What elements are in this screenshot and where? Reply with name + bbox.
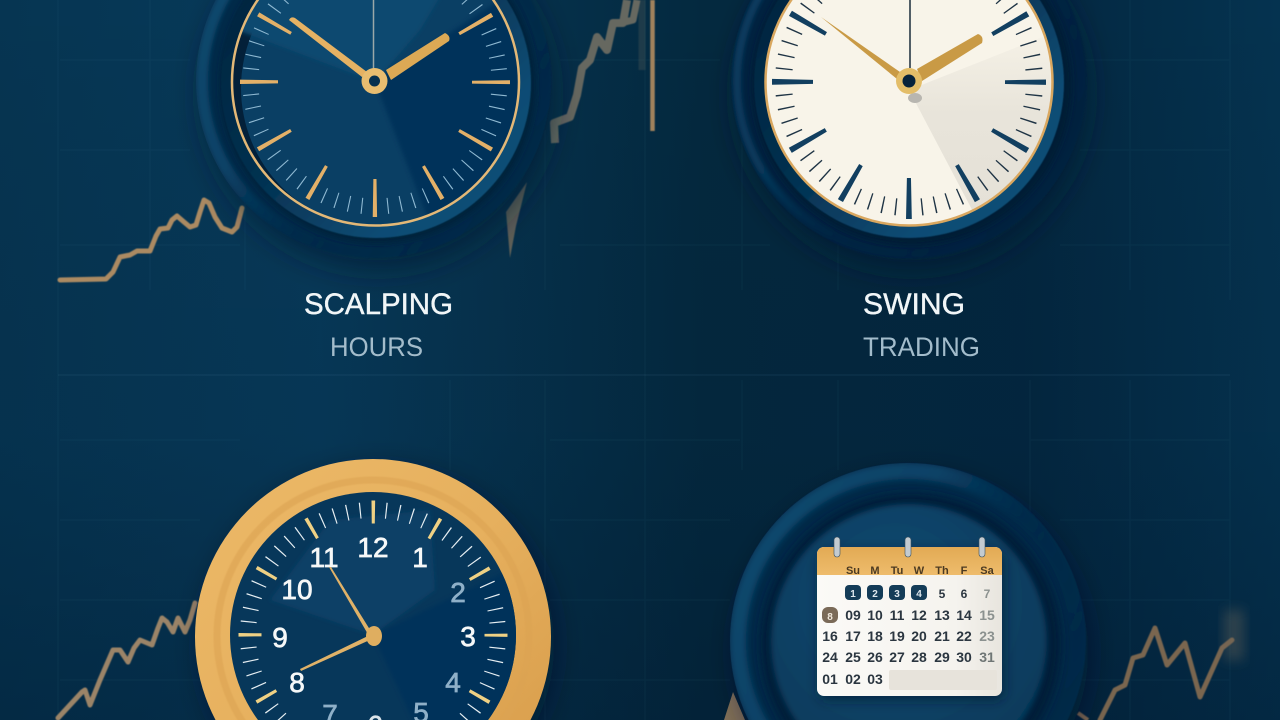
chart: rising line left of clock three <box>58 603 195 718</box>
clock: scalping <box>197 0 554 270</box>
chart: faded line right of scalping clock <box>506 0 652 258</box>
weekday labels: F <box>961 565 968 577</box>
numerals <box>272 532 476 720</box>
pivot <box>366 626 382 646</box>
label: swing: SWING <box>863 288 965 321</box>
gold ring <box>766 0 1052 226</box>
minute ticks <box>248 510 498 720</box>
clock shadow and bezel <box>731 0 1088 270</box>
numerals: 10 <box>281 574 313 605</box>
numerals: 2 <box>450 577 466 608</box>
day numbers: 28 <box>911 649 927 665</box>
clock face <box>229 491 530 720</box>
numerals: 1 <box>412 542 428 573</box>
hour ticks <box>259 0 491 198</box>
day numbers: 10 <box>867 607 883 623</box>
day numbers: 22 <box>956 628 972 644</box>
calendar page <box>817 547 1002 696</box>
hands <box>300 567 372 671</box>
calendar <box>817 537 1004 700</box>
day numbers: 19 <box>889 628 905 644</box>
day numbers: 29 <box>934 649 950 665</box>
label: hours: HOURS <box>330 332 423 362</box>
pivot <box>896 68 922 103</box>
day numbers: 03 <box>867 671 883 687</box>
day numbers: 21 <box>934 628 950 644</box>
day numbers: 7 <box>984 587 991 601</box>
day numbers: 14 <box>956 607 972 623</box>
chart: rising line left of scalping clock <box>60 200 242 280</box>
hour ticks <box>250 512 496 720</box>
day numbers: 31 <box>979 649 995 665</box>
day numbers: 17 <box>845 628 861 644</box>
day numbers: 24 <box>822 649 838 665</box>
minute hand <box>289 17 367 77</box>
hour hand <box>917 34 982 81</box>
numerals: 3 <box>460 621 476 652</box>
chart: fragment beside calendar <box>724 692 745 720</box>
day numbers: 16 <box>822 628 838 644</box>
weekday labels: Tu <box>891 565 903 577</box>
dial disc <box>730 463 1088 720</box>
minute ticks <box>784 0 1034 208</box>
calendar shadow <box>819 552 1004 700</box>
numerals: 9 <box>272 622 288 653</box>
day numbers: 11 <box>890 607 905 623</box>
day numbers: 2 <box>872 589 878 600</box>
gold ring <box>232 0 519 226</box>
day numbers: 18 <box>867 628 883 644</box>
day numbers: 3 <box>894 589 900 600</box>
day numbers: 6 <box>961 587 968 601</box>
day numbers: 5 <box>939 587 946 601</box>
blank cells <box>889 670 997 690</box>
weekday labels: W <box>914 565 925 577</box>
day numbers <box>822 587 995 687</box>
weekday labels <box>846 565 995 577</box>
numerals: 4 <box>445 667 461 698</box>
day numbers: 20 <box>911 628 927 644</box>
numerals: 8 <box>289 667 305 698</box>
chart: line right of calendar <box>1078 610 1244 720</box>
second hand <box>372 0 374 70</box>
day numbers: 02 <box>845 671 861 687</box>
clock: numbered gold <box>195 459 554 720</box>
day numbers: 27 <box>889 649 905 665</box>
calendar header <box>817 547 1002 575</box>
numerals: 11 <box>309 542 339 573</box>
numerals: 12 <box>357 532 389 563</box>
second hand <box>909 0 911 68</box>
label: scalping: SCALPING <box>304 288 453 321</box>
day numbers: 15 <box>979 607 995 623</box>
day numbers: 26 <box>867 649 883 665</box>
label: trading: TRADING <box>863 332 980 362</box>
day numbers: 25 <box>845 649 861 665</box>
hour hand <box>386 33 450 80</box>
day numbers: 01 <box>822 671 838 687</box>
day numbers: 23 <box>979 628 995 644</box>
calendar dial <box>730 463 1088 720</box>
binding pins <box>834 537 985 557</box>
clock face <box>234 0 518 224</box>
day numbers: 4 <box>916 589 922 600</box>
day numbers: 12 <box>911 607 927 623</box>
clock shadow and bezel <box>197 0 554 270</box>
clock: swing <box>731 0 1088 270</box>
clock face <box>765 0 1060 240</box>
day numbers: 30 <box>956 649 972 665</box>
weekday labels: M <box>870 565 880 577</box>
weekday labels: Th <box>935 565 949 577</box>
gold bezel <box>195 459 554 720</box>
hour ticks <box>792 0 1026 198</box>
weekday labels: Su <box>846 565 860 577</box>
minute ticks <box>250 0 500 206</box>
minute hand <box>821 17 900 79</box>
pivot <box>362 68 388 94</box>
highlighted days <box>822 585 927 623</box>
day numbers: 1 <box>850 589 856 600</box>
day numbers: 13 <box>934 607 950 623</box>
day numbers: 8 <box>827 612 833 623</box>
weekday labels: Sa <box>980 565 995 577</box>
day numbers: 09 <box>845 607 861 623</box>
